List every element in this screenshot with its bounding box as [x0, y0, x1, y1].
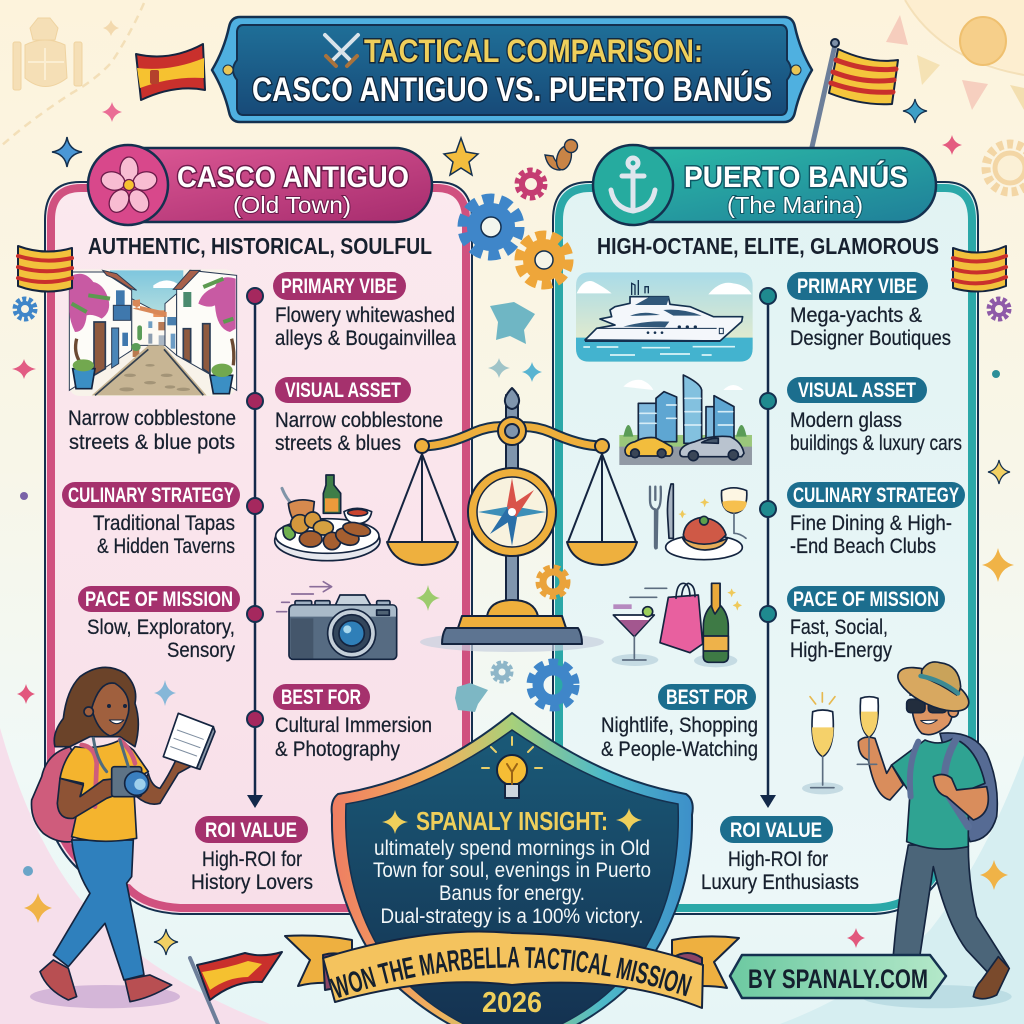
text: ROI: High-ROI for — [728, 848, 828, 871]
image caption left: streets & blue pots — [69, 431, 235, 454]
shoe — [973, 957, 1009, 999]
image caption left — [68, 407, 236, 454]
text: pace: Slow, Exploratory, — [87, 616, 235, 639]
text: ROI: History Lovers — [191, 871, 313, 894]
text: culinary: & Hidden Taverns — [97, 535, 235, 558]
shield heading: SPANALY INSIGHT: — [416, 806, 608, 836]
text: visual asset: Narrow cobblestone — [275, 409, 443, 432]
pill: culinary strategy: CULINARY STRATEGY — [68, 484, 234, 507]
text: best for: & People-Watching — [601, 738, 758, 761]
backpack — [940, 733, 997, 842]
notepad — [163, 713, 213, 768]
pill: primary vibe — [787, 272, 928, 300]
traveller: woman with camera — [30, 667, 215, 1008]
icon: orange gear — [520, 236, 568, 284]
right building — [177, 270, 237, 390]
icon: left side flag — [18, 246, 72, 292]
text: pace: High-Energy — [790, 639, 892, 662]
legs — [53, 840, 144, 980]
hair — [910, 687, 956, 710]
pill: ROI value: ROI VALUE — [730, 819, 822, 842]
icon: right side flag — [953, 246, 1006, 292]
text: primary vibe: Mega-yachts & — [790, 304, 922, 327]
text: culinary — [93, 512, 235, 558]
icon: small gears sides — [15, 299, 1009, 319]
bunting decoration top right — [886, 0, 1024, 192]
shield body text: ultimately spend mornings in Old — [374, 837, 650, 860]
text: best for — [601, 714, 758, 761]
timeline left — [247, 288, 263, 808]
text: best for: Nightlife, Shopping — [601, 714, 758, 737]
scale base — [442, 600, 582, 644]
pill: primary vibe: PRIMARY VIBE — [281, 275, 397, 298]
ribbon banner: WON THE MARBELLA TACTICAL MISSION — [330, 946, 692, 998]
timeline right — [760, 288, 776, 808]
shield: Spanaly insight — [332, 713, 693, 1024]
tagline left: AUTHENTIC, HISTORICAL, SOULFUL — [88, 233, 432, 259]
text: pace: Sensory — [167, 639, 235, 662]
hair — [54, 667, 138, 747]
illustration: camera — [277, 582, 397, 659]
glass — [860, 697, 878, 737]
illustration: fine dining — [650, 484, 747, 560]
illustration: tapas plate — [275, 475, 380, 561]
text: culinary: Traditional Tapas — [93, 512, 235, 535]
illustration: balance scales with compass — [387, 388, 637, 652]
pill: ROI value: ROI VALUE — [205, 819, 297, 842]
text: primary vibe: Flowery whitewashed — [275, 304, 455, 327]
title banner — [212, 17, 812, 122]
icon: marmot — [545, 140, 578, 171]
compass needles — [478, 478, 546, 546]
text: visual asset — [275, 409, 443, 455]
straps — [910, 742, 918, 797]
bougainvillea — [76, 339, 80, 362]
title line 1: TACTICAL COMPARISON: — [364, 33, 703, 69]
text: primary vibe: alleys & Bougainvillea — [275, 327, 456, 350]
text: best for — [275, 714, 432, 761]
text: pace — [87, 616, 235, 662]
camera — [112, 767, 142, 797]
text: primary vibe: Designer Boutiques — [790, 327, 951, 350]
illustration: cocktail, bag, champagne — [612, 583, 742, 667]
shoes — [40, 960, 77, 1000]
panel header pill — [593, 145, 936, 225]
title line 2: CASCO ANTIGUO VS. PUERTO BANÚS — [252, 71, 772, 109]
text: primary vibe — [790, 304, 951, 350]
traveller: man with hat — [857, 659, 1012, 1008]
pill: culinary strategy — [787, 482, 965, 508]
panel header pill — [88, 145, 432, 225]
legs — [893, 845, 1008, 978]
text: culinary: -End Beach Clubs — [790, 535, 936, 558]
icon: flower — [99, 157, 159, 216]
text: ROI: High-ROI for — [202, 848, 302, 871]
pill: visual asset: VISUAL ASSET — [285, 379, 401, 402]
arms — [57, 778, 120, 818]
badge: by spanaly: BY SPANALY.COM — [748, 964, 928, 994]
pill: pace of mission: PACE OF MISSION — [793, 588, 939, 611]
road — [92, 345, 207, 395]
panel: Casco Antiguo — [45, 145, 472, 914]
icon: crossed swords — [325, 35, 358, 66]
hat — [892, 659, 975, 720]
illustration: yacht — [576, 272, 753, 362]
backpack straps — [82, 740, 135, 807]
ribbon banner — [284, 930, 740, 1009]
illustration: whitewashed street — [68, 269, 237, 396]
pill: best for: BEST FOR — [281, 686, 361, 709]
illustration: champagne flute — [802, 693, 843, 794]
icon: Spanish flag left — [136, 44, 205, 100]
pill: culinary strategy: CULINARY STRATEGY — [793, 484, 959, 507]
text: culinary: Fine Dining & High- — [790, 512, 952, 535]
left building — [69, 272, 132, 390]
pill: pace of mission: PACE OF MISSION — [85, 588, 233, 611]
shirt — [60, 740, 148, 841]
pill: primary vibe: PRIMARY VIBE — [797, 275, 917, 298]
icon: anchor — [611, 158, 655, 211]
text: pace: Fast, Social, — [790, 616, 888, 639]
text: pace — [790, 616, 892, 662]
pill: primary vibe — [273, 272, 406, 300]
shirt — [892, 738, 985, 849]
panel header pill: CASCO ANTIGUO — [177, 161, 409, 194]
face — [912, 693, 953, 735]
shield body text: Banus for energy. — [439, 882, 585, 905]
text: culinary — [790, 512, 952, 558]
text: ROI — [191, 848, 313, 894]
image caption left: Narrow cobblestone — [68, 407, 236, 430]
text: visual asset — [790, 409, 962, 455]
year: 2026 — [482, 987, 542, 1019]
text: primary vibe — [275, 304, 456, 350]
icon: blue gear — [464, 200, 518, 254]
pill: best for: BEST FOR — [666, 686, 748, 709]
icon: faded coat of arms — [13, 18, 82, 90]
icon: pink gear — [518, 171, 544, 197]
icon: light bulb — [482, 737, 542, 798]
text: best for: Cultural Immersion — [275, 714, 432, 737]
text: best for: & Photography — [275, 738, 400, 761]
far houses — [132, 299, 167, 345]
badge: by spanaly — [730, 955, 946, 998]
icon: small Spanish flag bottom — [190, 952, 282, 1024]
panel header pill: (The Marina) — [727, 192, 863, 218]
panel: Puerto Banús — [553, 145, 978, 914]
sunglasses — [907, 699, 925, 713]
camera strap — [93, 738, 128, 772]
pill: culinary strategy — [62, 482, 240, 508]
tagline right: HIGH-OCTANE, ELITE, GLAMOROUS — [597, 233, 939, 259]
panel header pill: (Old Town) — [233, 192, 351, 218]
pill: visual asset: VISUAL ASSET — [798, 379, 916, 402]
arms — [858, 737, 903, 800]
icon: Catalan flag with pole — [812, 39, 898, 147]
shield body text: Dual-strategy is a 100% victory. — [380, 905, 644, 928]
panel header pill: PUERTO BANÚS — [684, 160, 908, 194]
backpack — [31, 747, 87, 842]
shield body text — [373, 837, 651, 928]
text: ROI: Luxury Enthusiasts — [701, 871, 859, 894]
shield body text: Town for soul, evenings in Puerto — [373, 859, 651, 882]
icon: star — [444, 138, 478, 175]
icon: lower gears — [493, 568, 575, 707]
pots — [73, 369, 95, 389]
text: visual asset: streets & blues — [275, 432, 401, 455]
face — [92, 683, 129, 736]
text: visual asset: Modern glass — [790, 409, 902, 432]
text: ROI — [701, 848, 859, 894]
text: visual asset: buildings & luxury cars — [790, 432, 962, 455]
illustration: buildings and cars — [619, 375, 752, 465]
